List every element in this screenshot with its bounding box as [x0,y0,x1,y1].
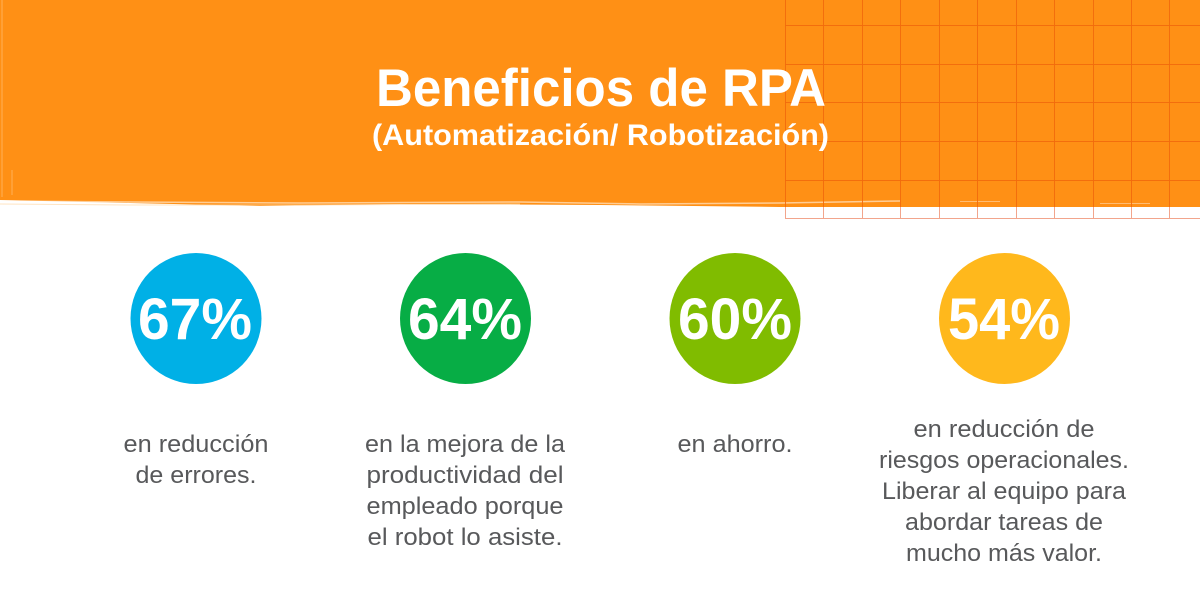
stat: 54%: abordar tareas de [905,509,1103,536]
stat: 64%: el robot lo asiste. [368,524,562,551]
stat: 54% [879,253,1129,567]
decorative grid [785,0,1200,219]
stat: 60%: en ahorro. [678,431,792,458]
stat: 64% [365,253,565,551]
stat: 54%: 54% [948,287,1060,352]
stat: 60% [670,253,800,458]
title: (Automatización/ Robotización) [372,119,829,152]
stat: 60%: 60% [678,287,792,352]
stat: 67% [124,253,268,489]
stat: 64%: 64% [408,287,522,352]
stat: 54%: mucho más valor. [906,540,1102,567]
title: Beneficios de RPA [376,59,826,118]
stat: 54%: Liberar al equipo para [882,478,1126,505]
title [372,59,829,152]
stat: 67%: de errores. [136,462,256,489]
stat: 67%: en reducción [124,431,268,458]
stat: 64%: productividad del [366,462,564,489]
stat: 54%: riesgos operacionales. [879,447,1129,474]
stat: 64%: empleado porque [366,493,564,520]
stat: 64%: en la mejora de la [365,431,565,458]
header banner [0,0,1200,207]
stat: 54%: en reducción de [914,416,1094,443]
stat: 67%: 67% [138,287,252,352]
